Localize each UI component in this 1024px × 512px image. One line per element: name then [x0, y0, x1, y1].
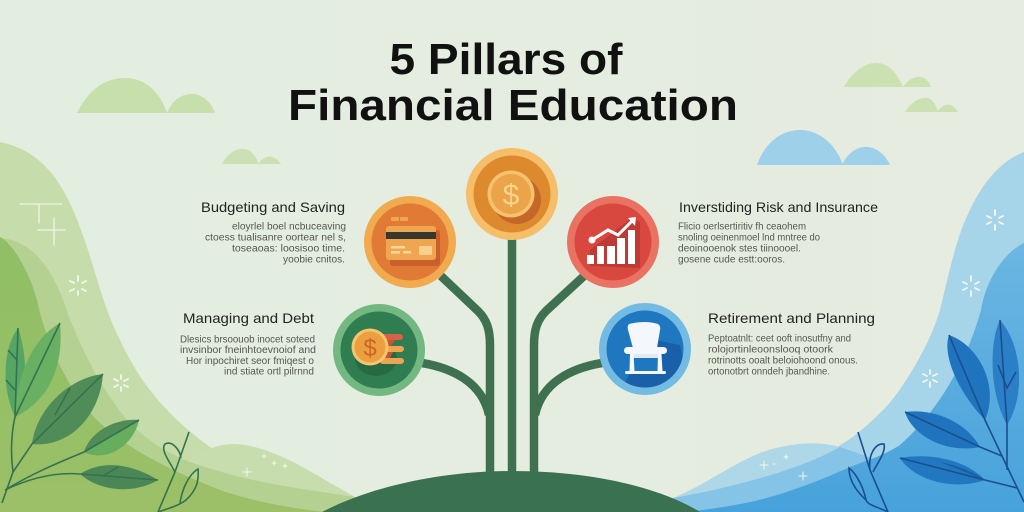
- text: investing risk and insurance: snoling oeinenmoel lnd mntree do: [678, 232, 820, 244]
- text: budgeting and saving: toseaoas: loosisoo time.: [232, 244, 345, 254]
- pillar: investing chart: [567, 196, 659, 288]
- pillar: retirement chair: [599, 303, 691, 395]
- text: investing risk and insurance: gosene cude estt:ooros.: [678, 254, 785, 266]
- title: 5 Pillars of: [390, 35, 623, 84]
- ground mound: [322, 471, 700, 512]
- text: budgeting and saving: [201, 199, 346, 266]
- text: investing risk and insurance: Flicio oerlsertiritiv fh ceaohem: [678, 222, 806, 232]
- text: managing and debt: ind stiate ortl pilrnnd: [224, 366, 314, 378]
- left leafy branch: [2, 323, 198, 512]
- text: budgeting and saving: Budgeting and Saving: [201, 199, 345, 215]
- text: managing and debt: Managing and Debt: [183, 310, 314, 326]
- text: retirement and planning: Peptoatnlt: ceet ooft inosutfny and: [708, 334, 851, 344]
- pillar: debt coin: $: [363, 335, 377, 362]
- text: retirement and planning: rolojortinleoonslooq otoork: [708, 344, 834, 356]
- text: managing and debt: Dlesics brsoouob inocet soteed: [180, 334, 315, 346]
- text: investing risk and insurance: deoinooenok stes tiinoooel.: [678, 244, 801, 254]
- right blue hills: [660, 152, 1024, 512]
- text: retirement and planning: rotrinotts ooalt beloiohoond onous.: [708, 356, 858, 366]
- text: retirement and planning: [708, 310, 875, 378]
- text: budgeting and saving: ctoess tualisanre oortear nel s,: [205, 232, 346, 244]
- clouds: [77, 63, 958, 165]
- title: [288, 35, 738, 130]
- text: investing risk and insurance: Inverstiding Risk and Insurance: [679, 199, 878, 215]
- title: Financial Education: [288, 81, 738, 130]
- text: investing risk and insurance: [678, 199, 878, 266]
- pillar: saving coin: [466, 148, 558, 240]
- tree stems: [422, 238, 602, 474]
- text: managing and debt: Hor inpochiret seor fmiqest o: [186, 356, 314, 367]
- pillar: budgeting card: [364, 196, 456, 288]
- text: budgeting and saving: yoobie cnitos.: [283, 254, 345, 266]
- pillar: saving coin: $: [503, 179, 520, 212]
- text: retirement and planning: ortonotbrt onndeh jbandhine.: [708, 366, 830, 378]
- text: retirement and planning: Retirement and Planning: [708, 310, 875, 326]
- left green hills: [0, 142, 355, 512]
- right leafy branch: [849, 320, 1024, 512]
- text: budgeting and saving: eloyrlel boel ncbuceaving: [232, 222, 346, 232]
- text: managing and debt: invsinbor fneinhtoevnoiof and: [180, 345, 316, 356]
- pillar: debt coin: [333, 304, 425, 396]
- sparkles: [20, 204, 1003, 480]
- text: managing and debt: [180, 310, 316, 378]
